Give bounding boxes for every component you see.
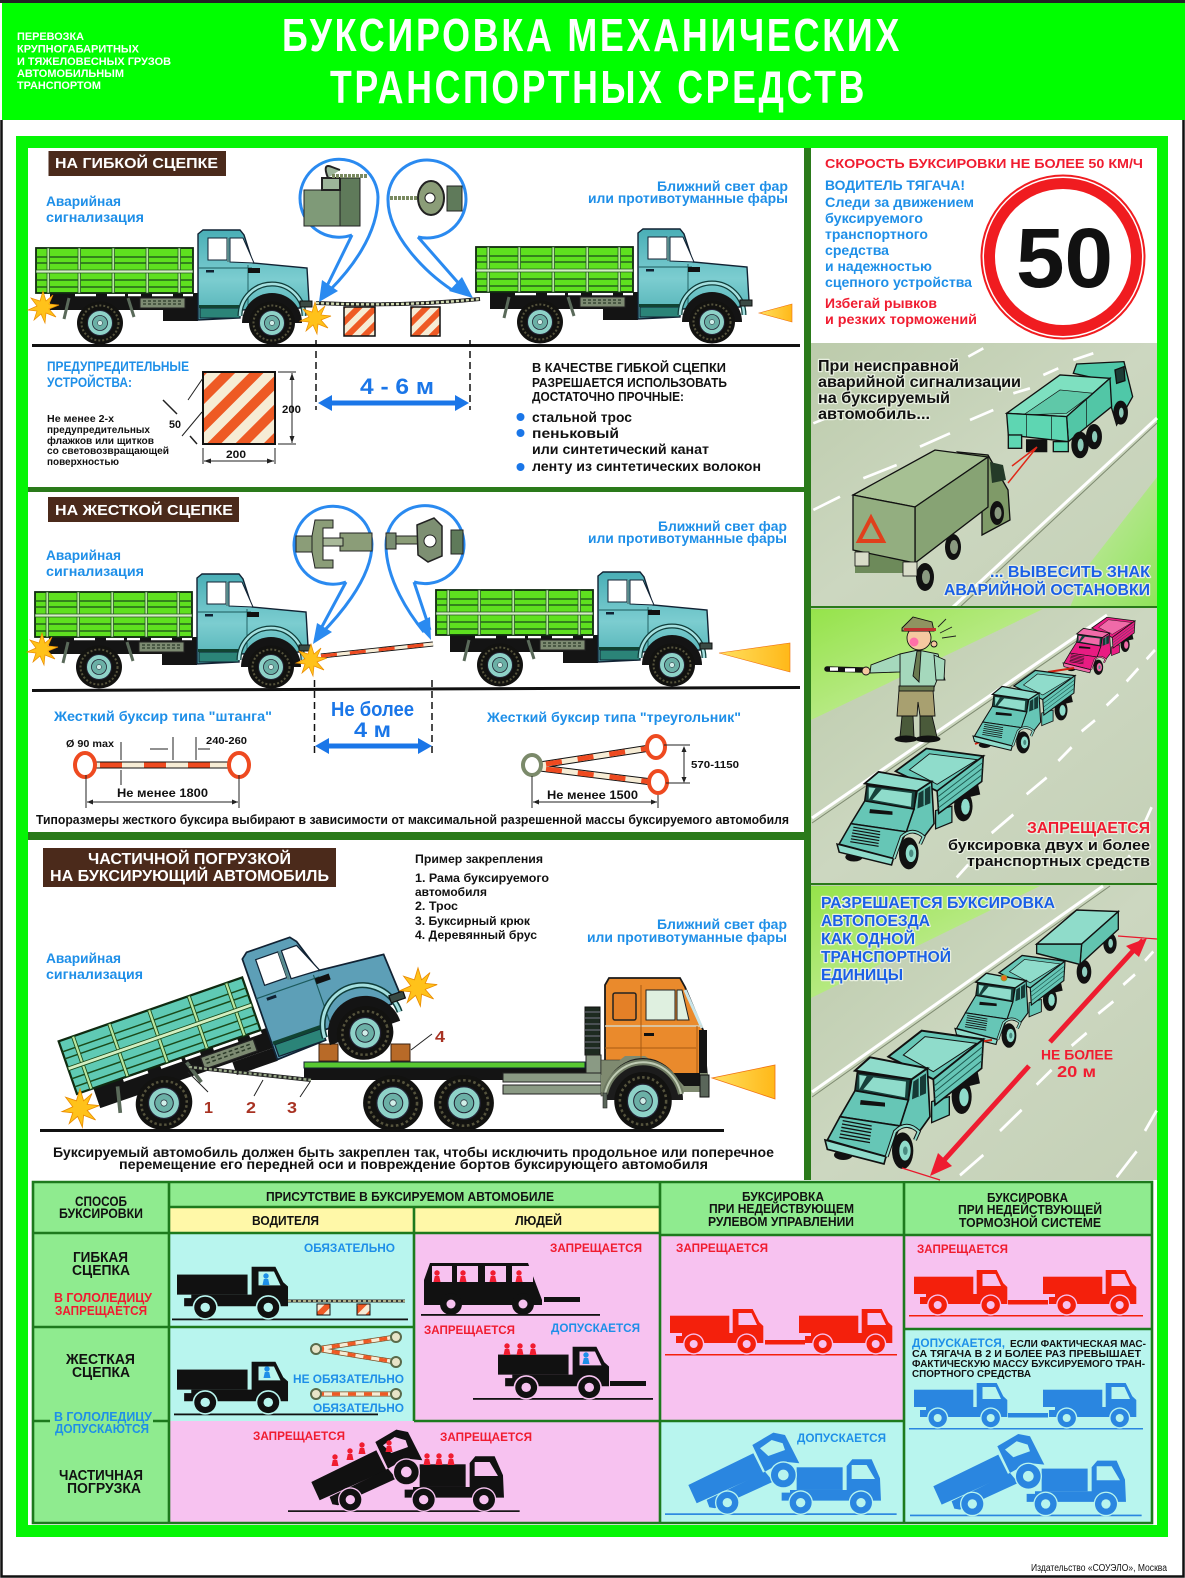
label: headlights	[587, 916, 787, 945]
tractor truck	[955, 955, 1065, 1048]
panel: partial loading	[40, 848, 787, 1172]
driver advice: Следи за движением	[825, 195, 974, 210]
cell: brake failure allowed: СПОРТНОГО СРЕДСТВА	[912, 1369, 1031, 1380]
column headings: ПРИ НЕДЕЙСТВУЮЩЕМ	[709, 1201, 854, 1216]
warning devices text: предупредительных	[47, 424, 150, 436]
icon: warning triangle	[859, 518, 883, 541]
towing truck	[476, 229, 752, 344]
text: prohibited: транспортных средств	[967, 853, 1150, 870]
text: hazard note	[818, 358, 1021, 423]
text: hazard note: При неисправной	[818, 358, 959, 375]
label: hazard lights	[46, 950, 143, 982]
cell: brake failure allowed: ЕСЛИ ФАКТИЧЕСКАЯ МАС-	[1010, 1339, 1146, 1350]
table backgrounds	[33, 1182, 1152, 1523]
panel: double towing prohibited	[811, 608, 1157, 883]
list of permitted materials: стальной трос	[532, 409, 632, 425]
warning board with dimensions: 50	[169, 419, 181, 431]
headlight beam	[759, 304, 792, 322]
cell: steering failure prohibited	[665, 1241, 897, 1356]
warning devices text: флажков или щитков	[47, 435, 155, 447]
warning devices text	[47, 359, 189, 468]
fastening example list: Пример закрепления	[415, 854, 543, 866]
callout: eye	[388, 160, 473, 298]
warning board with dimensions	[163, 372, 301, 464]
numbered callouts: 3	[287, 1100, 297, 1117]
tow rods	[1008, 447, 1037, 483]
jerk warning: и резких торможений	[825, 312, 977, 327]
ice notes: ЗАПРЕЩАЕТСЯ	[55, 1303, 147, 1318]
tow bar	[971, 1040, 992, 1043]
cell: flexible with driver	[172, 1241, 408, 1320]
cell: brake failure prohibited	[909, 1242, 1143, 1316]
label: headlights	[588, 518, 787, 546]
cell: people on rigid: ДОПУСКАЕТСЯ	[551, 1321, 640, 1335]
pink truck	[1063, 617, 1135, 675]
length arrow: 20 m: НЕ БОЛЕЕ	[1041, 1046, 1113, 1062]
row headings: ЧАСТИЧНАЯ	[59, 1468, 143, 1484]
towing truck	[436, 572, 712, 686]
bar tow diagram	[66, 735, 249, 808]
distance: 4-6 m	[318, 374, 469, 411]
heading: flexible hitch: НА ГИБКОЙ СЦЕПКЕ	[55, 154, 218, 172]
heading: flexible hitch	[48, 151, 226, 176]
cell: rigid with driver: НЕ ОБЯЗАТЕЛЬНО	[293, 1372, 404, 1386]
wooden blocks	[319, 1044, 410, 1061]
fastening rope	[189, 1067, 311, 1080]
cell: steering failure prohibited: ЗАПРЕЩАЕТСЯ	[676, 1241, 768, 1255]
label: hazard lights: Аварийная	[46, 950, 121, 966]
distance: 4 m max: Не более	[331, 699, 414, 721]
towing flatbed truck	[304, 978, 709, 1131]
loading note: Буксируемый автомобиль должен быть закреплен так, чтобы исключить продольное или поперечное	[53, 1145, 775, 1160]
column headings: ВОДИТЕЛЯ	[252, 1214, 319, 1228]
cell: steering failure partial allowed	[665, 1431, 897, 1515]
warning devices text: УСТРОЙСТВА:	[47, 375, 132, 390]
cell: brake failure allowed: СА ТЯГАЧА В 2 И БОЛЕЕ РАЗ ПРЕВЫШАЕТ	[912, 1349, 1141, 1360]
heading: rigid hitch	[48, 497, 239, 522]
middle truck	[973, 670, 1075, 753]
fastening example list: 2. Трос	[415, 901, 459, 913]
text: hang the sign: ... ВЫВЕСИТЬ ЗНАК	[990, 564, 1150, 581]
loading note: перемещение его передней оси и повреждение бортов буксирующего автомобиля	[119, 1157, 708, 1172]
warning devices text: со световозвращающей	[47, 445, 169, 457]
row headings: ПОГРУЗКА	[67, 1481, 142, 1497]
cell: people on flexible: ЗАПРЕЩАЕТСЯ	[550, 1241, 642, 1255]
panel: flexible hitch	[28, 151, 800, 474]
series subtitle: И ТЯЖЕЛОВЕСНЫХ ГРУЗОВ	[17, 56, 171, 68]
column headings: БУКСИРОВКА	[742, 1190, 824, 1204]
label: headlights: или противотуманные фары	[588, 530, 787, 546]
text: hang the sign	[944, 564, 1150, 599]
label: hazard lights	[46, 547, 144, 579]
panel: speed limit	[825, 156, 1146, 340]
traffic officer	[827, 617, 956, 742]
label: hazard lights: сигнализация	[46, 209, 144, 225]
ice notes: В ГОЛОЛЕДИЦУ	[54, 1290, 153, 1305]
hazard stars	[62, 968, 437, 1127]
trailer	[1037, 910, 1118, 983]
tipper truck	[1007, 362, 1133, 458]
bar tow diagram: Ø 90 max	[66, 738, 114, 750]
numbered callouts	[188, 1029, 445, 1117]
driver advice: буксируемого	[825, 211, 923, 226]
header band	[0, 0, 1185, 120]
cell: partial loading people: ЗАПРЕЩАЕТСЯ	[440, 1430, 532, 1444]
list of permitted materials: или синтетический канат	[532, 441, 709, 457]
heading: partial loading	[43, 848, 336, 887]
series subtitle: ТРАНСПОРТОМ	[17, 80, 101, 92]
cell: brake failure allowed: ДОПУСКАЕТСЯ,	[912, 1336, 1005, 1350]
hazard stars	[28, 291, 331, 334]
row headings: ЖЕСТКАЯ	[65, 1352, 135, 1368]
text: hang the sign: АВАРИЙНОЙ ОСТАНОВКИ	[944, 580, 1150, 599]
list of permitted materials: пеньковый	[532, 425, 619, 441]
row headings: БУКСИРОВКИ	[59, 1206, 143, 1221]
speed heading: СКОРОСТЬ БУКСИРОВКИ НЕ БОЛЕЕ 50 КМ/Ч	[825, 156, 1143, 171]
text: prohibited: ЗАПРЕЩАЕТСЯ	[1027, 820, 1150, 837]
bar tow diagram: Не менее 1800	[117, 788, 208, 800]
ice notes: В ГОЛОЛЕДИЦУ	[54, 1409, 153, 1424]
text: hazard note: на буксируемый	[818, 390, 950, 407]
numbered callouts: 1	[204, 1100, 213, 1117]
label: headlights: Ближний свет фар	[658, 518, 787, 534]
title: БУКСИРОВКА МЕХАНИЧЕСКИХ	[282, 9, 902, 61]
front truck	[837, 749, 983, 869]
text: allowed road train: АВТОПОЕЗДА	[821, 913, 930, 930]
text: allowed road train: ТРАНСПОРТНОЙ	[821, 947, 951, 966]
triangle tow label: Жесткий буксир типа "треугольник"	[486, 709, 741, 725]
tow rod	[975, 668, 1074, 744]
fastening example list: 1. Рама буксируемого	[415, 873, 549, 885]
text: hazard note: аварийной сигнализации	[818, 374, 1021, 391]
distance markers	[314, 680, 432, 753]
text: prohibited: буксировка двух и более	[948, 837, 1150, 854]
list of permitted materials: РАЗРЕШАЕТСЯ ИСПОЛЬЗОВАТЬ	[532, 375, 727, 390]
bar tow label: Жесткий буксир типа "штанга"	[53, 708, 272, 724]
triangle tow diagram: Не менее 1500	[547, 790, 638, 802]
column headings: ЛЮДЕЙ	[515, 1213, 562, 1228]
row headings	[59, 1194, 143, 1497]
panel: broken hazard lights	[811, 343, 1157, 607]
cell: rigid with driver	[174, 1332, 404, 1415]
column headings: БУКСИРОВКА	[987, 1191, 1068, 1205]
label: hazard lights: Аварийная	[46, 547, 121, 563]
label: hazard lights: сигнализация	[46, 563, 144, 579]
cell: brake failure allowed: ФАКТИЧЕСКУЮ МАССУ БУКСИРУЕМОГО ТРАН-	[912, 1359, 1145, 1370]
row headings: СЦЕПКА	[72, 1263, 131, 1279]
warning flags	[344, 307, 440, 336]
road	[40, 1129, 724, 1132]
ice notes	[54, 1290, 153, 1436]
rigid tow note: Типоразмеры жесткого буксира выбирают в зависимости от максимальной разрешенной массы буксируемого автомобиля	[36, 813, 789, 827]
towed truck	[35, 574, 311, 688]
cell: rigid with driver: ОБЯЗАТЕЛЬНО	[313, 1401, 404, 1415]
hazard stars	[27, 633, 327, 676]
headlight beam	[712, 1065, 775, 1099]
ice notes: ДОПУСКАЮТСЯ	[55, 1421, 149, 1436]
road	[32, 344, 800, 347]
distance: 4 m max: 4 м	[354, 719, 391, 742]
covered van truck	[853, 450, 1010, 591]
text: allowed road train: ЕДИНИЦЫ	[821, 967, 903, 984]
fastening example list: автомобиля	[415, 887, 487, 899]
fastening example list: 4. Деревянный брус	[415, 930, 538, 942]
icon: speed sign 50: 50	[1016, 211, 1113, 305]
series subtitle: КРУПНОГАБАРИТНЫХ	[17, 44, 140, 56]
label: hazard lights	[46, 193, 144, 225]
title: ТРАНСПОРТНЫХ СРЕДСТВ	[330, 61, 867, 113]
cell: brake failure prohibited: ЗАПРЕЩАЕТСЯ	[917, 1242, 1008, 1256]
row headings: СПОСОБ	[75, 1194, 127, 1209]
fastening example list: 3. Буксирный крюк	[415, 916, 530, 928]
bar tow diagram: 240-260	[206, 735, 247, 747]
driver advice: транспортного	[825, 227, 928, 242]
column headings: ПРИСУТСТВИЕ В БУКСИРУЕМОМ АВТОМОБИЛЕ	[266, 1190, 554, 1204]
table: towing rules	[33, 1182, 1152, 1523]
beacon	[1001, 975, 1007, 981]
label: headlights: или противотуманные фары	[587, 929, 787, 945]
distance: 4-6 m: 4 - 6 м	[360, 374, 434, 399]
cell: people on rigid: ЗАПРЕЩАЕТСЯ	[424, 1323, 515, 1337]
jerk warning	[825, 296, 977, 327]
numbered callouts: 2	[246, 1100, 256, 1117]
text: allowed road train	[821, 895, 1055, 984]
list of permitted materials	[516, 360, 761, 474]
series subtitle: АВТОМОБИЛЬНЫМ	[17, 68, 124, 80]
heading: partial loading: ЧАСТИЧНОЙ ПОГРУЗКОЙ	[88, 850, 291, 868]
triangle tow diagram: 570-1150	[691, 759, 739, 771]
list of permitted materials: В КАЧЕСТВЕ ГИБКОЙ СЦЕПКИ	[532, 360, 726, 375]
triangle tow diagram	[523, 736, 739, 808]
column headings	[252, 1190, 1102, 1230]
icon: speed sign 50	[980, 174, 1146, 340]
cell: people on flexible	[421, 1241, 642, 1316]
row headings: СЦЕПКА	[72, 1365, 131, 1381]
title	[282, 9, 902, 113]
series subtitle: ПЕРЕВОЗКА	[17, 31, 84, 43]
warning board with dimensions: 200	[226, 449, 246, 461]
callout: clevis	[386, 506, 464, 640]
warning board with dimensions: 200	[282, 404, 301, 416]
panel: rigid hitch	[27, 497, 800, 827]
warning devices text: ПРЕДУПРЕДИТЕЛЬНЫЕ	[47, 359, 189, 374]
numbered callouts: 4	[435, 1029, 445, 1046]
fastening example list	[415, 854, 549, 942]
distance: 4 m max	[315, 699, 432, 754]
list of permitted materials: ДОСТАТОЧНО ПРОЧНЫЕ:	[532, 389, 684, 404]
column headings: РУЛЕВОМ УПРАВЛЕНИИ	[708, 1215, 854, 1229]
headlight beam	[719, 643, 790, 672]
label: headlights: или противотуманные фары	[588, 190, 788, 206]
cell: partial loading people	[253, 1429, 532, 1512]
warning devices text: Не менее 2-х	[47, 413, 114, 425]
panel: road train allowed	[811, 885, 1157, 1180]
text: allowed road train: КАК ОДНОЙ	[821, 929, 915, 948]
column headings: ТОРМОЗНОЙ СИСТЕМЕ	[959, 1215, 1101, 1230]
cell: flexible with driver: ОБЯЗАТЕЛЬНО	[304, 1241, 395, 1255]
callout: hook	[300, 159, 378, 302]
warning devices text: поверхностью	[47, 456, 119, 468]
driver advice: средства	[825, 243, 890, 258]
label: headlights: Ближний свет фар	[657, 916, 787, 932]
tow rope	[316, 299, 480, 304]
list of permitted materials: ленту из синтетических волокон	[532, 458, 761, 474]
length arrow: 20 m	[902, 936, 1157, 1180]
cell: people on rigid	[424, 1321, 653, 1400]
length arrow: 20 m: 20 м	[1057, 1064, 1096, 1081]
towed truck	[36, 230, 312, 344]
driver advice: ВОДИТЕЛЬ ТЯГАЧА!	[825, 178, 965, 193]
text: prohibited	[948, 820, 1150, 870]
cell: brake failure allowed	[909, 1336, 1146, 1516]
label: hazard lights: сигнализация	[46, 966, 143, 982]
cell: steering failure partial allowed: ДОПУСКАЕТСЯ	[797, 1431, 886, 1445]
cell: partial loading people: ЗАПРЕЩАЕТСЯ	[253, 1429, 345, 1443]
label: headlights	[588, 178, 788, 206]
text: allowed road train: РАЗРЕШАЕТСЯ БУКСИРОВКА	[821, 895, 1055, 912]
driver advice: сцепного устройства	[825, 275, 972, 290]
jerk warning: Избегай рывков	[825, 296, 937, 311]
road	[32, 686, 800, 692]
loading note	[53, 1145, 775, 1172]
heading: rigid hitch: НА ЖЕСТКОЙ СЦЕПКЕ	[55, 501, 233, 519]
label: headlights: Ближний свет фар	[657, 178, 788, 194]
lead towed truck	[825, 1031, 983, 1169]
series subtitle	[17, 31, 171, 92]
driver advice	[825, 178, 974, 290]
label: hazard lights: Аварийная	[46, 193, 121, 209]
driver advice: и надежностью	[825, 259, 932, 274]
row headings: ГИБКАЯ	[73, 1250, 128, 1266]
tow bar	[321, 644, 433, 656]
text: hazard note: автомобиль...	[818, 406, 930, 423]
callout: eye bolt	[294, 506, 372, 644]
column headings: ПРИ НЕДЕЙСТВУЮЩЕЙ	[958, 1202, 1102, 1217]
heading: partial loading: НА БУКСИРУЮЩИЙ АВТОМОБИЛЬ	[50, 867, 329, 885]
distance markers	[316, 340, 470, 410]
towed tilted truck	[51, 908, 421, 1154]
